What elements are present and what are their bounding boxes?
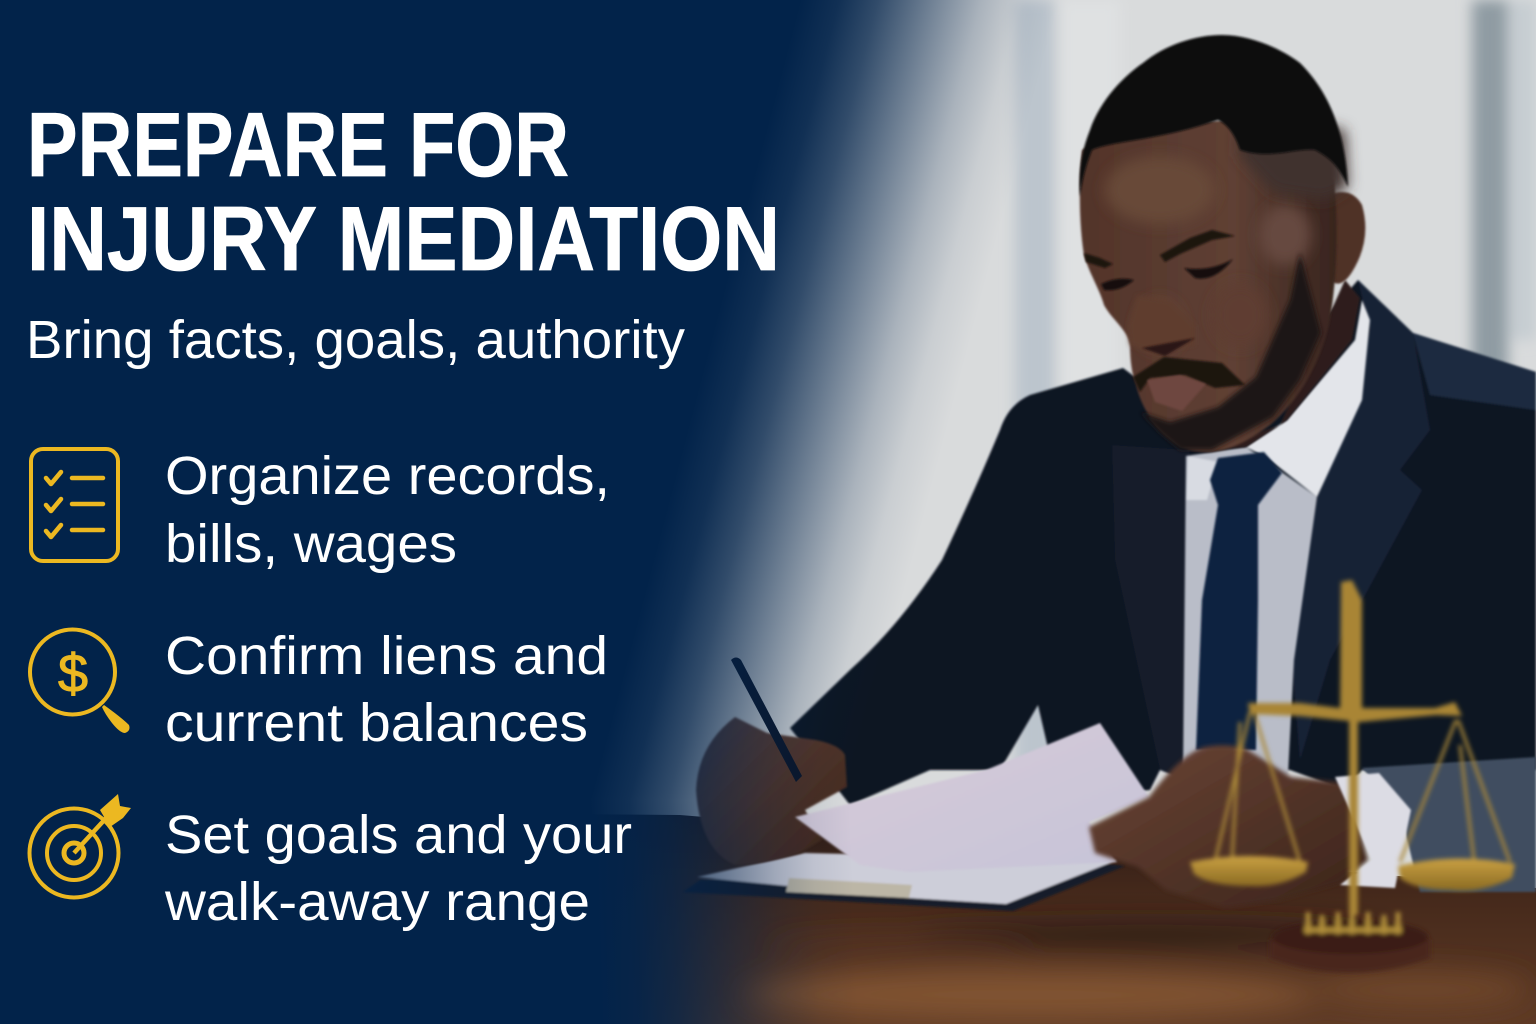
wooden base [1270, 922, 1430, 973]
neck [1210, 280, 1360, 450]
shirt cuff [1335, 773, 1411, 888]
item: confirm liens [30, 626, 608, 753]
necktie [1196, 452, 1282, 750]
beard [1140, 253, 1321, 450]
text: current balances [165, 693, 588, 753]
text [165, 626, 608, 753]
head [1079, 35, 1365, 452]
grey suit sleeve [1362, 757, 1536, 892]
text: bills, wages [165, 514, 457, 574]
text: Confirm liens and [165, 626, 608, 686]
desk [0, 810, 1536, 1024]
text [164, 805, 632, 932]
pans [1190, 856, 1308, 886]
metal clip [786, 878, 912, 898]
right hand [1089, 745, 1368, 908]
nose [1128, 295, 1195, 352]
paper held in hand [795, 723, 1149, 872]
item: set goals [30, 794, 632, 932]
ear [1324, 192, 1365, 284]
text: Organize records, [165, 446, 610, 506]
fade haircut [1239, 120, 1348, 200]
base ornament [1304, 912, 1402, 934]
scales of justice [1190, 580, 1515, 973]
pen [731, 658, 802, 782]
eyebrows, eyes [1084, 230, 1235, 290]
face [1080, 120, 1337, 452]
text: Set goals and your [165, 805, 632, 865]
subtitle: Bring facts, goals, authority [26, 310, 685, 370]
moustache [1133, 357, 1245, 392]
icon: checklist [31, 449, 118, 561]
shirt and collar [1183, 300, 1370, 775]
icon: magnifier with dollar [30, 630, 130, 733]
suit jacket [790, 280, 1536, 805]
pillar and beam [1340, 580, 1362, 915]
document clipboard [683, 853, 1125, 911]
item: organize records [31, 446, 610, 574]
icon: magnifier with dollar: $ [58, 644, 88, 704]
lips [1147, 375, 1206, 411]
lapels [1290, 280, 1430, 760]
title: PREPARE FOR [27, 95, 569, 196]
title: INJURY MEDIATION [27, 189, 780, 290]
icon: target with arrow [30, 794, 131, 898]
text: walk-away range [164, 872, 590, 932]
chains [1215, 712, 1510, 862]
left hand [696, 717, 847, 865]
hair [1079, 35, 1348, 197]
title [27, 95, 780, 290]
text [165, 446, 610, 574]
